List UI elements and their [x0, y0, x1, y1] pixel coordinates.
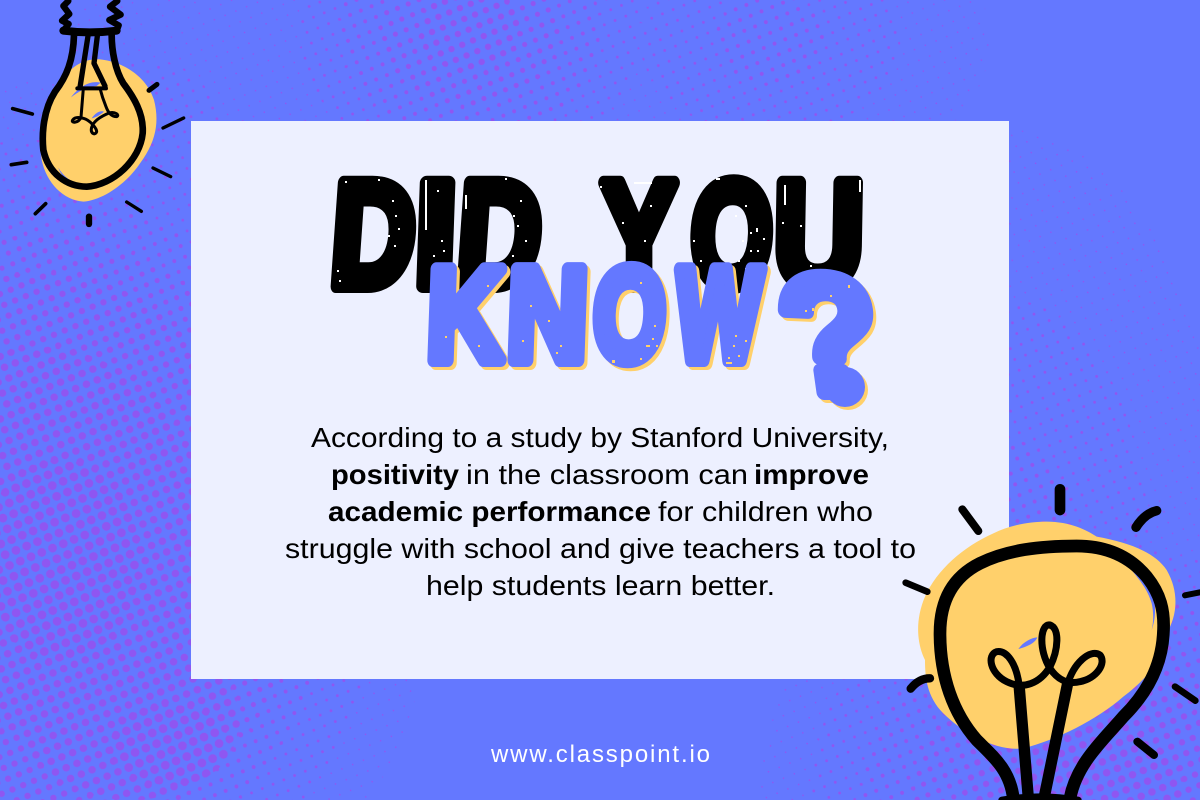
- body text: for children who: [658, 496, 873, 527]
- body text: According to a study by Stanford University,: [311, 422, 889, 453]
- title: KNOW?: O: [591, 242, 668, 389]
- icon: large light bulb bottom right: [906, 489, 1200, 800]
- title: KNOW?: [425, 241, 892, 430]
- body text: in the classroom can: [466, 459, 748, 490]
- title: DID YOU: D: [452, 152, 547, 318]
- title: KNOW?: N: [505, 241, 590, 388]
- body text: improve: [754, 459, 869, 490]
- title: KNOW?: K: [425, 242, 506, 389]
- title: DID YOU: Y: [601, 151, 677, 319]
- body text: [285, 422, 916, 601]
- panel: main card: [191, 121, 1009, 679]
- title: KNOW?: W: [672, 241, 765, 388]
- body text: academic performance: [328, 496, 651, 527]
- title: DID YOU: D: [326, 152, 421, 318]
- title: DID YOU: [326, 150, 865, 319]
- body text: help students learn better.: [426, 570, 775, 601]
- icon: small light bulb top left: [11, 1, 184, 224]
- title: KNOW?: ?: [767, 242, 892, 430]
- footer url: www.classpoint.io: [490, 741, 710, 768]
- title: DID YOU: U: [772, 151, 865, 319]
- title: DID YOU: I: [412, 150, 460, 318]
- body text: struggle with school and give teachers a tool to: [285, 533, 916, 564]
- title: DID YOU: O: [688, 152, 776, 318]
- body text: positivity: [331, 459, 459, 490]
